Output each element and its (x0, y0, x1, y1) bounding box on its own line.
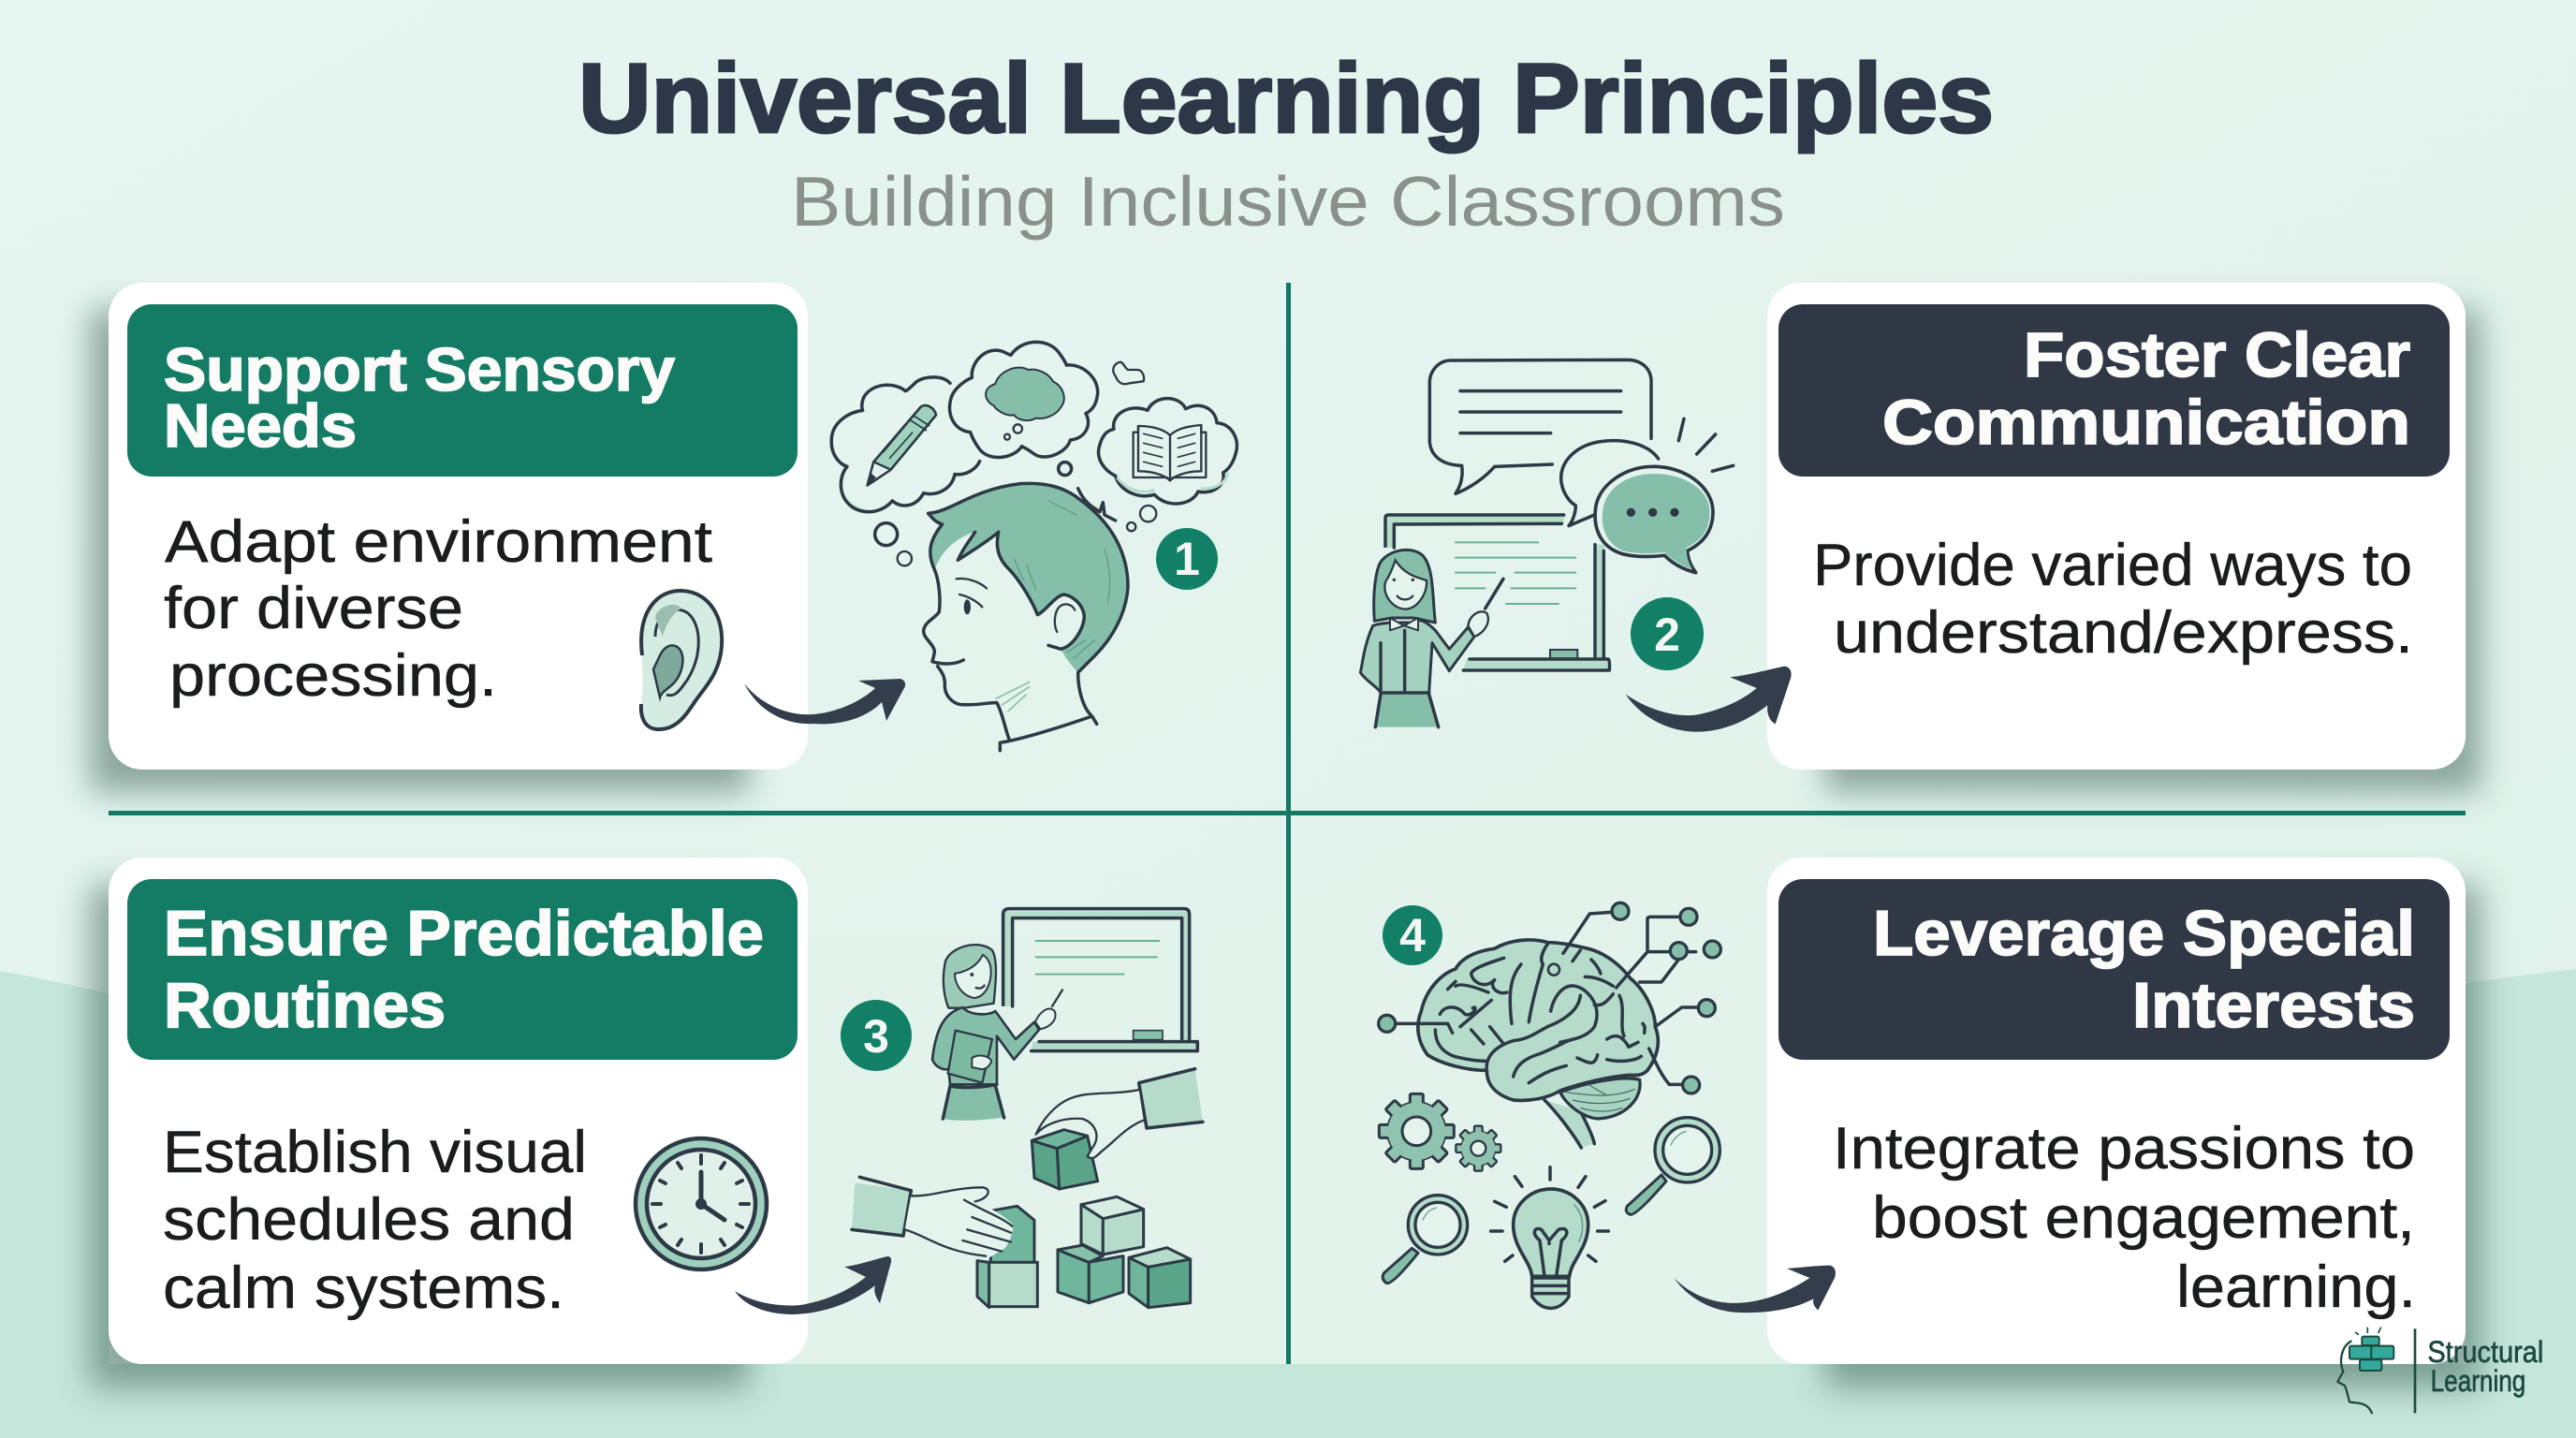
arrow 3 (735, 1256, 891, 1314)
body text: support sensory needs: Adapt environment (165, 509, 713, 575)
body text: ensure predictable routines: Establish visual (163, 1120, 587, 1185)
subtitle: Building Inclusive Classrooms (791, 162, 1785, 241)
body text: leverage special interests: learning. (2176, 1255, 2416, 1320)
arrow 4 (1674, 1266, 1836, 1313)
number badge 3 (841, 1000, 912, 1071)
panel: foster clear communication (1767, 283, 2481, 792)
teacher (1360, 550, 1503, 727)
illustration: teacher with speech bubbles (1360, 360, 1734, 727)
logo: structural learning: Structural (2427, 1335, 2543, 1369)
heading bar: foster clear communication: Foster Clear (2024, 320, 2410, 390)
heading bar: support sensory needs: Support Sensory (164, 335, 675, 404)
heading bar: leverage special interests (1778, 879, 2450, 1060)
body text: support sensory needs: for diverse (164, 576, 463, 641)
heading bar: ensure predictable routines (127, 879, 798, 1060)
whiteboard (1385, 515, 1610, 670)
number badge 2 (1631, 597, 1704, 670)
icon: gears (1379, 1093, 1500, 1171)
logo: structural learning (2337, 1328, 2543, 1413)
speech bubble large (1429, 360, 1651, 493)
brain (1418, 940, 1669, 1148)
panel: support sensory needs (90, 283, 808, 792)
heading bar: foster clear communication: Communication (1882, 388, 2410, 458)
hand placing block (1032, 1069, 1203, 1189)
number badge 1 (1156, 528, 1218, 590)
circuit lines (1379, 902, 1720, 1093)
heading bar: ensure predictable routines: Routines (164, 970, 446, 1041)
arrow 1 (744, 679, 905, 724)
icon: magnifying glass left (1383, 1196, 1468, 1284)
body text: leverage special interests (1833, 1116, 2416, 1320)
number badge 4: 4 (1399, 909, 1426, 961)
number badge 4 (1383, 905, 1442, 965)
body text: foster clear communication (1813, 533, 2413, 666)
panel: leverage special interests (1767, 858, 2481, 1387)
number badge 2: 2 (1654, 609, 1680, 661)
body text: foster clear communication: Provide varied ways to (1813, 533, 2412, 598)
body text: leverage special interests: Integrate passions to (1833, 1116, 2415, 1181)
title: Universal Learning Principles (578, 44, 1994, 154)
icon: clock (636, 1138, 767, 1269)
body text: foster clear communication: understand/express. (1834, 600, 2413, 666)
icon: pencil (868, 405, 936, 485)
body text: support sensory needs (164, 509, 713, 709)
icon: ear (640, 591, 722, 729)
heading bar: support sensory needs (127, 304, 798, 477)
body text: support sensory needs: processing. (169, 643, 497, 709)
illustration: brain with ideas (1379, 902, 1720, 1308)
icon: open book (1134, 425, 1206, 480)
hand and stacked blocks (852, 1177, 1037, 1308)
logo: structural learning: Learning (2431, 1364, 2525, 1398)
number badge 1: 1 (1174, 533, 1200, 585)
heading bar: leverage special interests: Leverage Special (1873, 898, 2415, 969)
icon: magnifying glass right (1626, 1118, 1720, 1214)
pyramid of blocks (1058, 1196, 1191, 1308)
body text: leverage special interests: boost engagement, (1872, 1185, 2415, 1251)
body text: ensure predictable routines: calm systems. (163, 1255, 564, 1321)
illustration: teacher with blocks (852, 909, 1203, 1308)
illustration: child with thought clouds (831, 342, 1237, 751)
number badge 3: 3 (863, 1010, 889, 1063)
arrow 2 (1626, 667, 1792, 732)
hair (929, 483, 1128, 672)
icon: light bulb (1491, 1167, 1608, 1308)
heading bar: foster clear communication (1778, 304, 2450, 477)
teacher (932, 945, 1062, 1121)
whiteboard (1003, 909, 1197, 1051)
heading bar: ensure predictable routines: Ensure Predictable (164, 898, 764, 969)
body text: ensure predictable routines (163, 1120, 587, 1321)
speech bubbles small (1561, 418, 1734, 573)
body text: ensure predictable routines: schedules and (163, 1187, 575, 1253)
panel: ensure predictable routines (90, 858, 808, 1387)
heading bar: support sensory needs: Needs (164, 391, 357, 460)
heading bar: leverage special interests: Interests (2132, 970, 2415, 1041)
